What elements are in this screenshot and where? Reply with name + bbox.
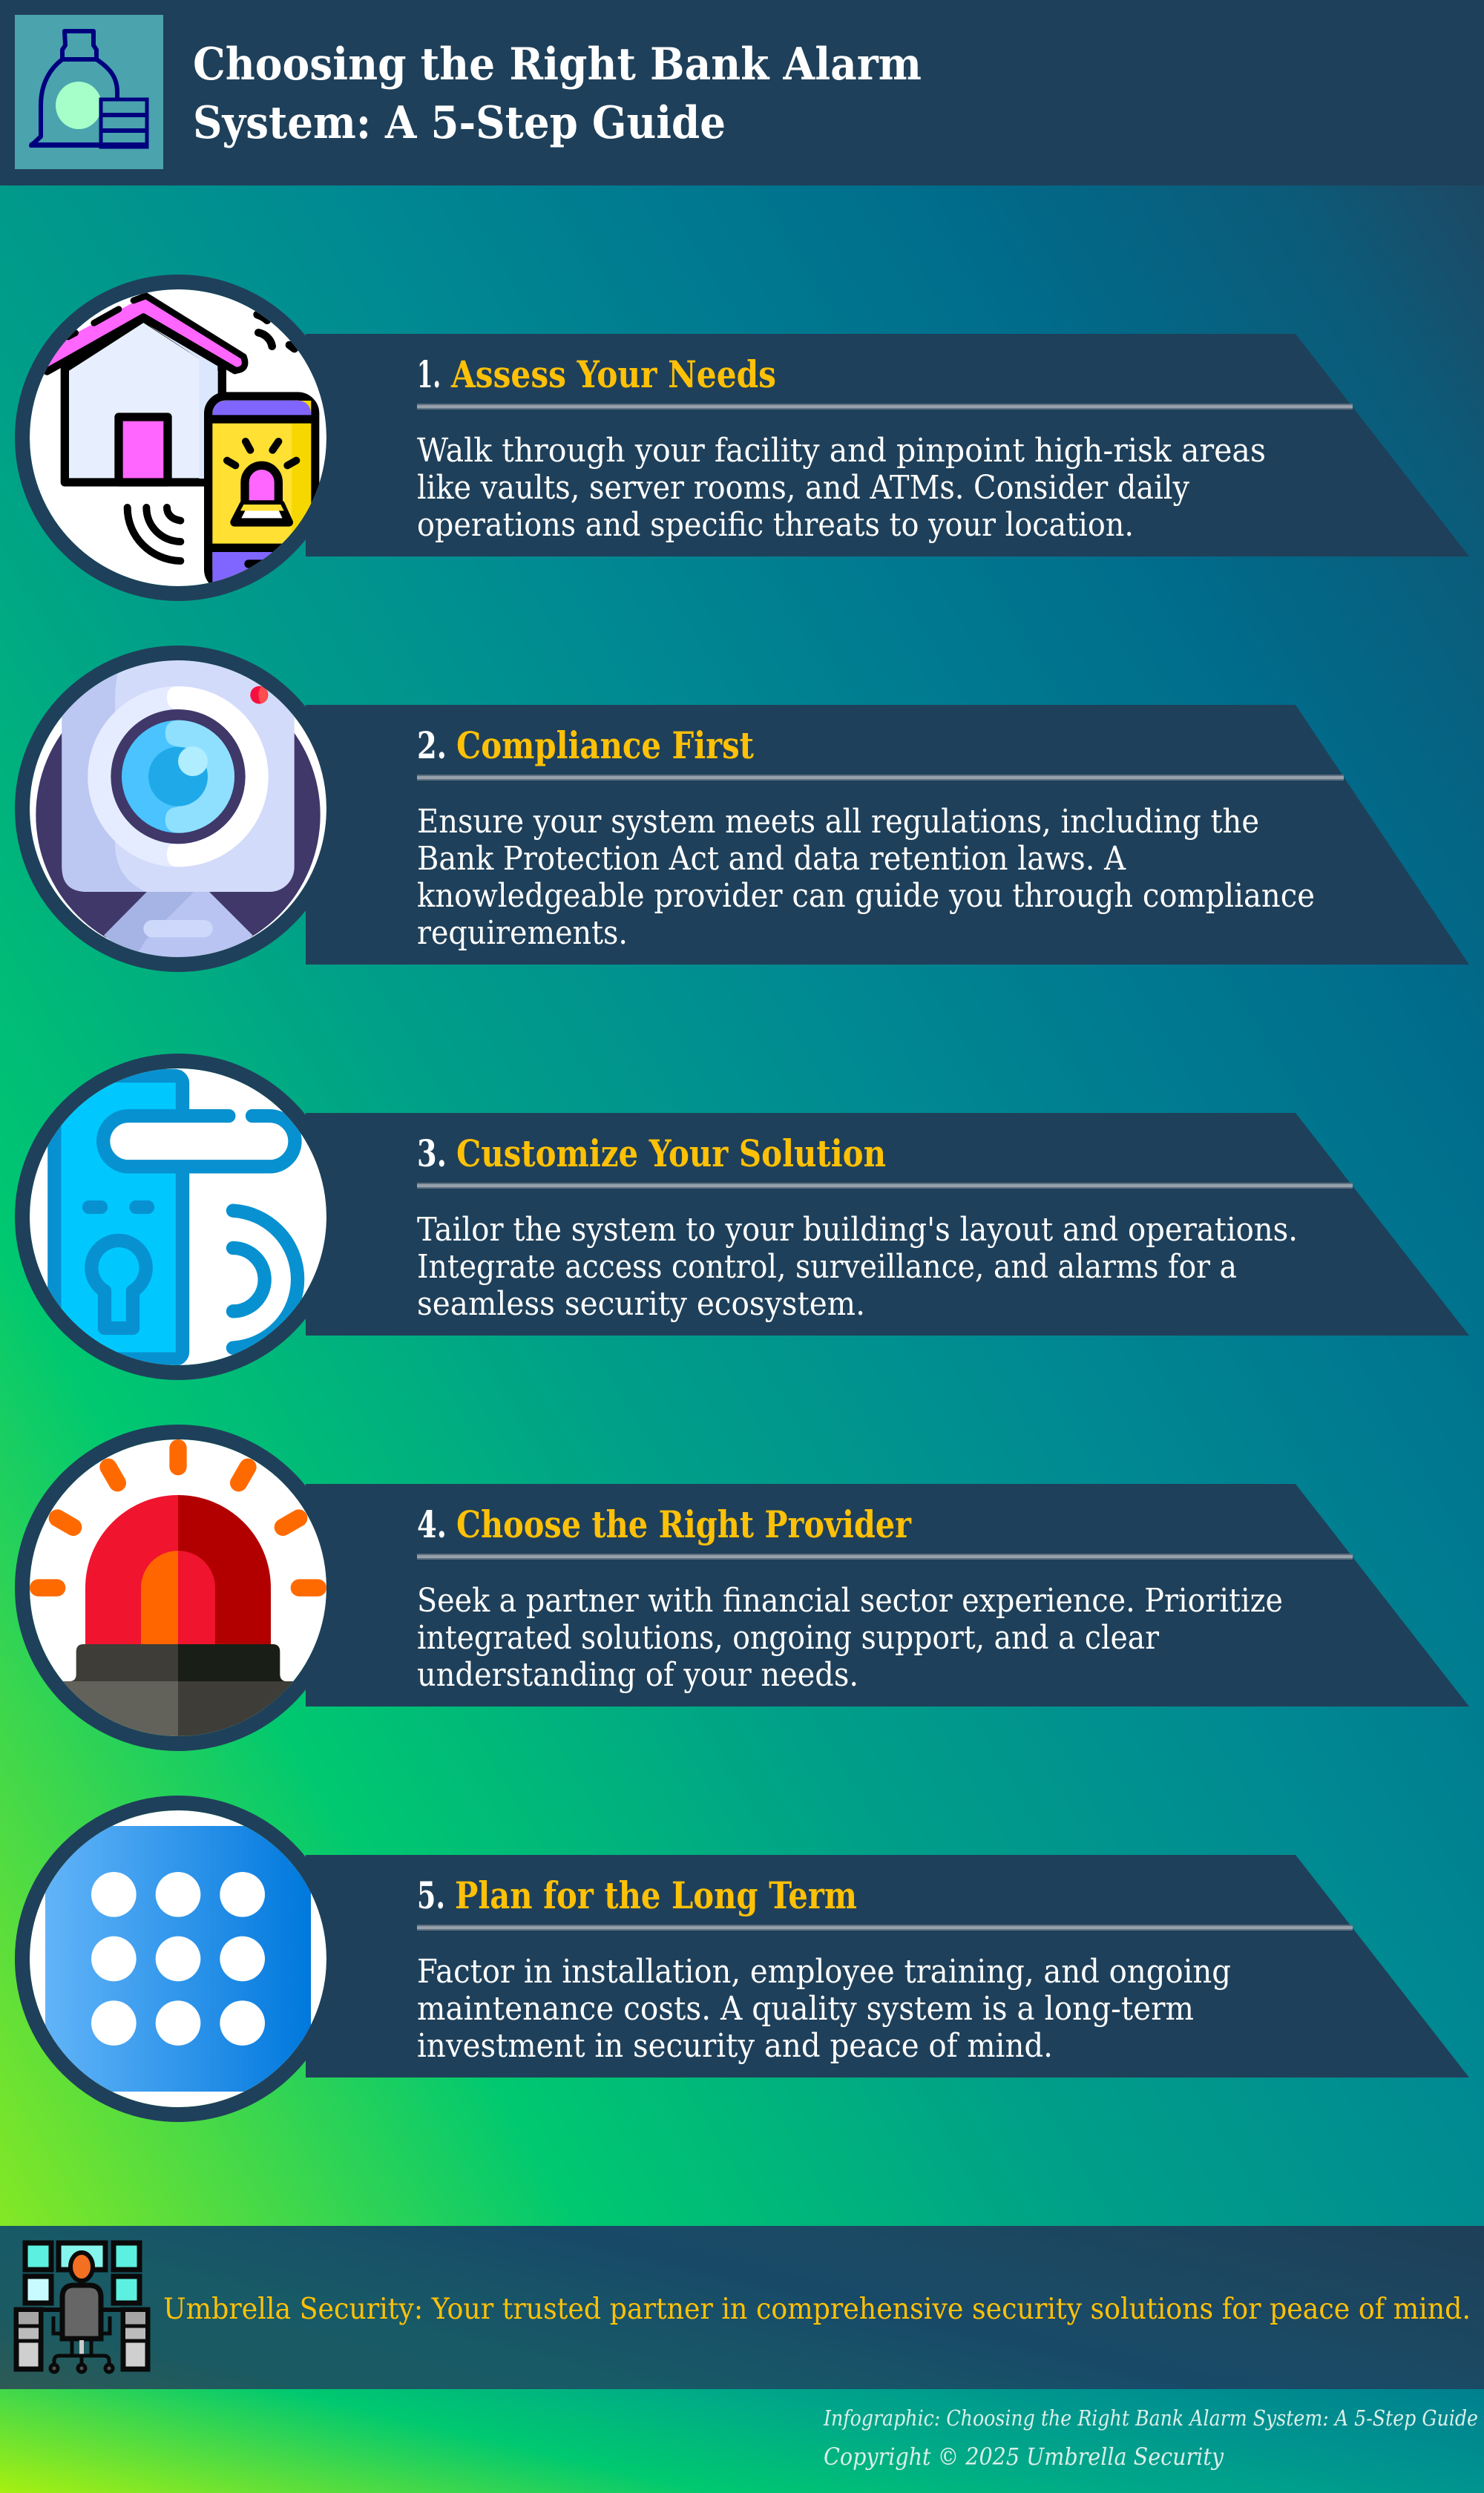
step 1 body text: operations and specific threats to your location. bbox=[417, 506, 1134, 544]
step 1 heading: 1. bbox=[417, 352, 441, 396]
step 3 heading: 3. bbox=[417, 1131, 447, 1175]
step 2 body text: requirements. bbox=[417, 914, 628, 952]
step 1 body text: like vaults, server rooms, and ATMs. Consider daily bbox=[417, 469, 1189, 507]
source and copyright bbox=[823, 2405, 1478, 2471]
icon: security operator at monitors bbox=[16, 2243, 148, 2372]
step 3 body text bbox=[417, 1211, 1298, 1323]
step 5 body text bbox=[417, 1953, 1231, 2065]
step 1 body text: Walk through your facility and pinpoint high-risk areas bbox=[417, 432, 1266, 470]
step 2 body text: Bank Protection Act and data retention laws. A bbox=[417, 840, 1126, 878]
step 4 body text: understanding of your needs. bbox=[417, 1656, 858, 1694]
step 3 heading: Customize Your Solution bbox=[456, 1131, 886, 1175]
icon: webcam bbox=[22, 646, 334, 965]
step 4 body text bbox=[417, 1582, 1283, 1694]
step 5 body text: Factor in installation, employee training, and ongoing bbox=[417, 1953, 1231, 1991]
step 2 body text: knowledgeable provider can guide you through compliance bbox=[417, 877, 1315, 915]
footer band bbox=[0, 2226, 1484, 2389]
step 4 body text: integrated solutions, ongoing support, and a clear bbox=[417, 1619, 1160, 1657]
panel: step 4 bbox=[306, 1484, 1469, 1707]
step 3 body text: seamless security ecosystem. bbox=[417, 1285, 865, 1323]
step 2 body text bbox=[417, 803, 1315, 952]
icon: keypad bbox=[22, 1803, 334, 2115]
title: Choosing the Right Bank Alarm bbox=[193, 39, 922, 91]
step 4 body text: Seek a partner with financial sector experience. Prioritize bbox=[417, 1582, 1283, 1620]
step 5 heading: 5. bbox=[417, 1873, 445, 1917]
step 2 body text: Ensure your system meets all regulations, including the bbox=[417, 803, 1259, 841]
step 3 body text: Integrate access control, surveillance, and alarms for a bbox=[417, 1248, 1237, 1286]
step 4 heading: Choose the Right Provider bbox=[456, 1502, 912, 1546]
icon: bank alarm logo bbox=[15, 15, 163, 169]
step 5 heading: Plan for the Long Term bbox=[455, 1873, 857, 1917]
title: System: A 5-Step Guide bbox=[193, 97, 726, 149]
footer background strip bbox=[0, 2389, 1484, 2493]
panel: step 1 bbox=[306, 334, 1469, 556]
source and copyright: Copyright © 2025 Umbrella Security bbox=[824, 2443, 1224, 2471]
icon: house and phone alarm bbox=[22, 282, 334, 594]
step 3 body text: Tailor the system to your building's layout and operations. bbox=[417, 1211, 1298, 1249]
icon: red siren bbox=[22, 1432, 334, 1746]
step 5 body text: maintenance costs. A quality system is a long-term bbox=[417, 1990, 1194, 2028]
step 1 heading: Assess Your Needs bbox=[450, 352, 776, 396]
step 2 heading: 2. bbox=[417, 723, 447, 767]
step 5 body text: investment in security and peace of mind. bbox=[417, 2027, 1053, 2065]
icon: smart door lock bbox=[22, 1061, 334, 1373]
step 2 heading: Compliance First bbox=[456, 723, 754, 767]
step 1 body text bbox=[417, 432, 1266, 544]
panel: step 2 bbox=[306, 705, 1469, 965]
panel: step 5 bbox=[306, 1855, 1469, 2078]
title bbox=[193, 39, 922, 149]
header band bbox=[0, 0, 1484, 185]
step 4 heading: 4. bbox=[417, 1502, 447, 1546]
panel: step 3 bbox=[306, 1113, 1469, 1336]
